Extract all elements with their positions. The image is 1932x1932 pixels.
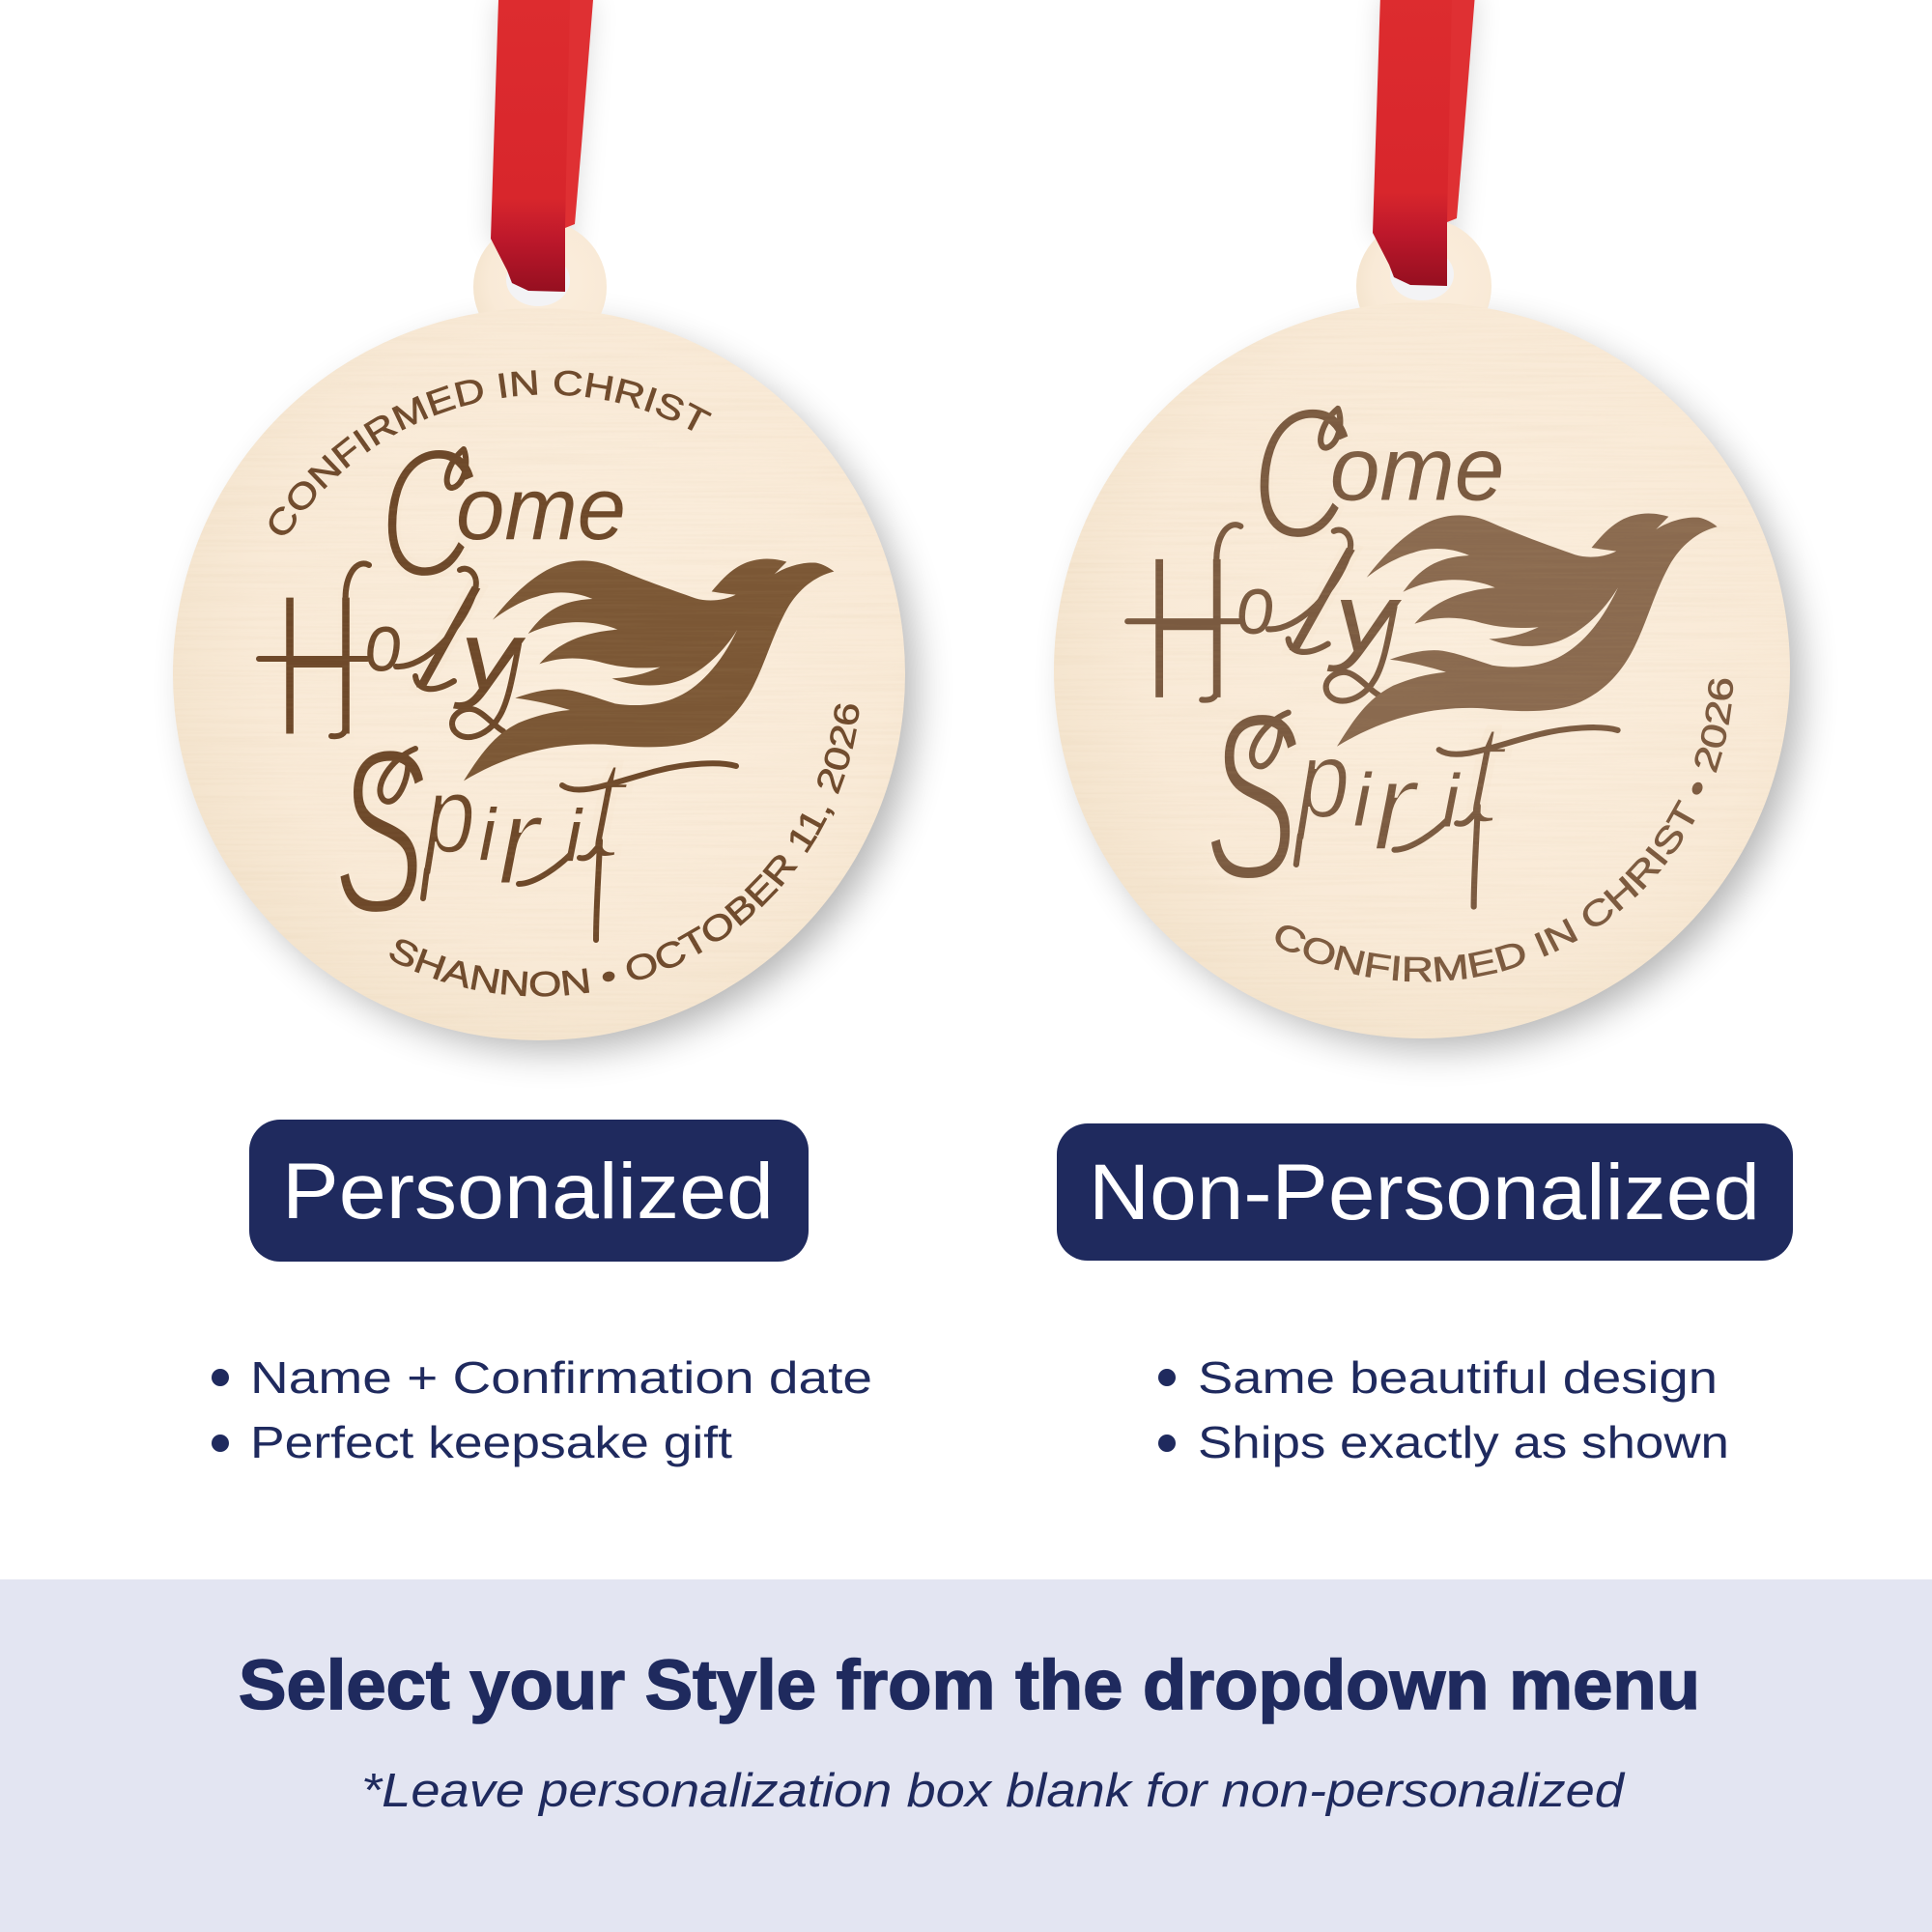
- wood grain overlay: [1054, 302, 1790, 1038]
- word: spirit: r: [1373, 735, 1420, 878]
- word: holy: H: [1144, 510, 1233, 746]
- wooden disc and hanging tab: [173, 220, 905, 1040]
- list: non-personalized features: Same beautiful design: [1198, 1352, 1718, 1403]
- panel: footer band: [0, 1579, 1932, 1932]
- word: holy: o: [1236, 559, 1274, 651]
- word: spirit: t: [585, 726, 631, 889]
- word: spirit: p: [1295, 719, 1350, 841]
- panel: non-personalized ornament: [1051, 0, 1822, 1070]
- word: holy: y: [1326, 563, 1403, 673]
- curved text: confirmed in christ and year: CONFIRMED IN CHRIST • 2026: [1275, 678, 1733, 981]
- ribbon shadow: [491, 0, 593, 292]
- curved text: confirmed in christ: CONFIRMED IN CHRIST: [269, 370, 712, 535]
- heading: select your style: Select your Style from the dropdown menu: [239, 1647, 1700, 1724]
- word: holy: l: [399, 547, 494, 734]
- script lettering: come holy spirit: [1127, 368, 1618, 931]
- list: personalized features: Name + Confirmation date: [250, 1352, 872, 1403]
- list: personalized features: [212, 1352, 872, 1467]
- wood grain overlay: [173, 308, 905, 1040]
- hanger hole: [506, 254, 570, 306]
- word: holy: o: [365, 597, 402, 688]
- word: spirit: t: [1463, 691, 1510, 855]
- badge: personalized: Personalized: [282, 1148, 774, 1236]
- word: come: C: [379, 409, 476, 616]
- badge: non-personalized: Non-Personalized: [1089, 1149, 1760, 1236]
- word: spirit: i: [479, 794, 497, 876]
- hanger hole: [1390, 248, 1454, 300]
- word: come: ome: [1330, 418, 1504, 519]
- word: spirit: i: [1353, 759, 1373, 841]
- list: personalized features: Perfect keepsake gift: [250, 1417, 732, 1467]
- list: non-personalized features: Ships exactly as shown: [1198, 1417, 1729, 1467]
- word: holy: l: [1271, 507, 1369, 697]
- red ribbon: [491, 0, 593, 292]
- word: holy: y: [453, 602, 526, 710]
- word: come: C: [1251, 368, 1350, 579]
- word: spirit: i: [1442, 760, 1461, 842]
- lettering swashes: [1127, 409, 1618, 907]
- script lettering: come holy spirit: [259, 409, 736, 963]
- word: spirit: S: [1205, 664, 1300, 931]
- word: spirit: S: [334, 698, 427, 963]
- flame dove: [1337, 513, 1718, 747]
- note: leave box blank: *Leave personalization box blank for non-personalized: [361, 1765, 1626, 1817]
- word: spirit: i: [565, 795, 583, 877]
- ornament shadow: [192, 327, 915, 1050]
- word: spirit: p: [422, 754, 475, 875]
- ornament shadow: [1073, 322, 1800, 1048]
- curved text: name and date: SHANNON • OCTOBER 11, 2026: [390, 703, 860, 997]
- word: holy: H: [274, 549, 361, 781]
- badge: non-personalized: [1057, 1123, 1793, 1261]
- ribbon shadow: [1375, 0, 1477, 286]
- wooden disc and hanging tab: [1054, 218, 1790, 1038]
- list: non-personalized features: [1158, 1352, 1729, 1467]
- word: come: ome: [456, 460, 626, 558]
- word: spirit: r: [497, 770, 544, 911]
- panel: personalized ornament: [170, 0, 937, 1072]
- red ribbon: [1373, 0, 1475, 286]
- badge: personalized: [249, 1120, 809, 1262]
- flame dove: [464, 559, 834, 781]
- lettering swashes: [259, 449, 736, 940]
